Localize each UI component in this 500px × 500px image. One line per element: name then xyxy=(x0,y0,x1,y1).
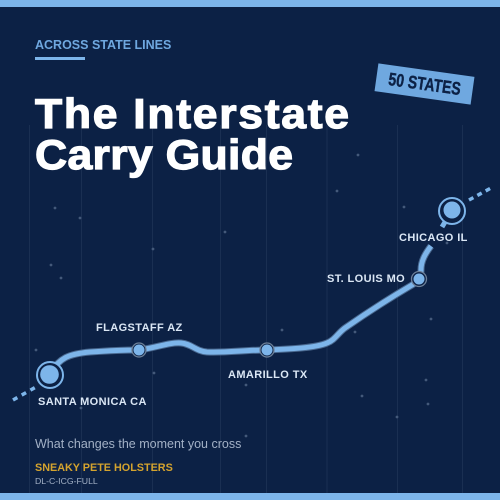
brand: SNEAKY PETE HOLSTERS xyxy=(35,462,173,474)
label: Santa Monica: SANTA MONICA CA xyxy=(38,396,147,408)
label: St. Louis: ST. LOUIS MO xyxy=(327,273,405,285)
top bar xyxy=(0,0,500,7)
route line xyxy=(50,212,451,373)
title xyxy=(34,90,351,178)
stop: Flagstaff xyxy=(132,343,146,357)
badge: 50 states xyxy=(375,63,474,104)
product code: DL-C-ICG-FULL xyxy=(35,476,98,486)
badge: 50 states: 50 STATES xyxy=(387,69,462,98)
eyebrow heading: ACROSS STATE LINES xyxy=(35,38,171,52)
stop: Amarillo xyxy=(260,343,274,357)
label: Chicago: CHICAGO IL xyxy=(399,232,468,244)
stop: Chicago xyxy=(439,198,465,224)
route dashed extension: east xyxy=(469,188,491,200)
bottom bar xyxy=(0,493,500,500)
title: The Interstate xyxy=(35,90,351,137)
route dashed extension: west xyxy=(13,387,36,400)
title: Carry Guide xyxy=(35,131,293,178)
eyebrow underline xyxy=(35,57,85,60)
label: Amarillo: AMARILLO TX xyxy=(228,369,308,381)
label: Flagstaff: FLAGSTAFF AZ xyxy=(96,322,183,334)
subtitle: What changes the moment you cross xyxy=(35,437,241,451)
stop: St. Louis xyxy=(412,272,426,286)
stop: Santa Monica xyxy=(37,362,63,388)
